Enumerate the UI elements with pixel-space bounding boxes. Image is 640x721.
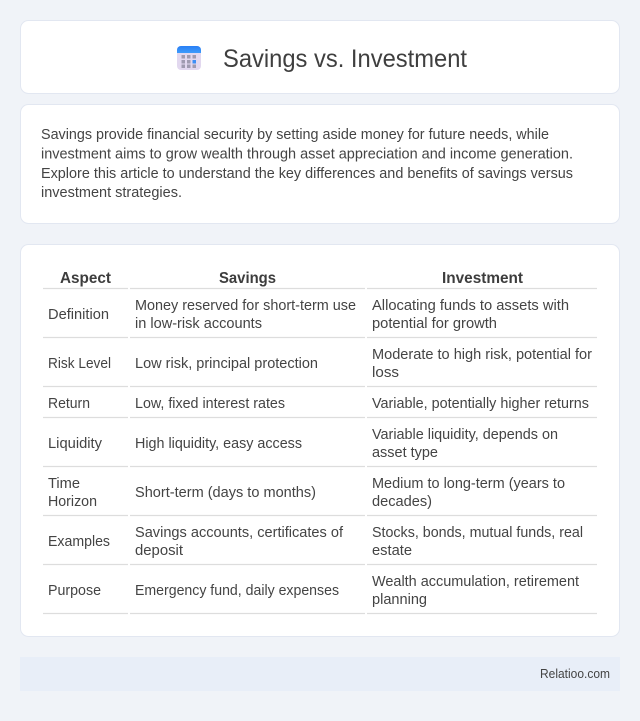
row: liquidity <box>48 427 558 461</box>
panel: header <box>20 20 620 94</box>
row: definition: Definition <box>48 307 109 323</box>
row: examples: estate <box>372 543 412 559</box>
row: definition: Money reserved for short-term use <box>135 298 356 314</box>
table header row <box>60 270 523 287</box>
row: risk level: Risk Level <box>48 356 111 372</box>
table header row: Savings <box>219 270 276 287</box>
row: liquidity: asset type <box>372 445 438 461</box>
row: examples: deposit <box>135 543 183 559</box>
row: time horizon: Short-term (days to months) <box>135 485 316 501</box>
description text: Explore this article to understand the key differences and benefits of savings versus <box>41 166 573 182</box>
row: return: Low, fixed interest rates <box>135 396 285 412</box>
row: purpose <box>48 574 579 608</box>
description text: Savings provide financial security by setting aside money for future needs, while <box>41 127 549 143</box>
row: return: Variable, potentially higher returns <box>372 396 589 412</box>
row: examples: Stocks, bonds, mutual funds, real <box>372 525 583 541</box>
row: definition <box>48 298 569 332</box>
row: liquidity: Variable liquidity, depends on <box>372 427 558 443</box>
row: purpose: Purpose <box>48 583 101 599</box>
row: definition: potential for growth <box>372 316 497 332</box>
row: time horizon: Horizon <box>48 494 97 510</box>
footer credit: Relatioo.com <box>540 667 610 681</box>
row: examples <box>48 525 583 559</box>
row: purpose: Emergency fund, daily expenses <box>135 583 339 599</box>
row: time horizon: Time <box>48 476 80 492</box>
row: definition: Allocating funds to assets with <box>372 298 569 314</box>
row: liquidity: Liquidity <box>48 436 103 452</box>
panel: comparison table <box>20 244 620 636</box>
table header row: Investment <box>442 270 523 287</box>
row: risk level: loss <box>372 365 399 381</box>
row: time horizon: Medium to long-term (years to <box>372 476 565 492</box>
row: examples: Examples <box>48 534 110 550</box>
panel: description <box>20 104 620 224</box>
row: purpose: Wealth accumulation, retirement <box>372 574 579 590</box>
row: time horizon <box>48 476 565 510</box>
row: liquidity: High liquidity, easy access <box>135 436 302 452</box>
row: return: Return <box>48 396 90 412</box>
table header row: Aspect <box>60 270 111 287</box>
description text: investment aims to grow wealth through asset appreciation and income generation. <box>41 146 573 162</box>
title: Savings vs. Investment <box>223 45 467 73</box>
row: risk level: Low risk, principal protection <box>135 356 318 372</box>
row: time horizon: decades) <box>372 494 432 510</box>
row: examples: Savings accounts, certificates of <box>135 525 344 541</box>
footer <box>20 657 620 691</box>
description text <box>41 127 573 201</box>
row: return <box>48 396 589 412</box>
icon: calendar <box>177 46 201 70</box>
row: risk level: Moderate to high risk, potential for <box>372 347 592 363</box>
row: definition: in low-risk accounts <box>135 316 262 332</box>
row: risk level <box>48 347 592 381</box>
description text: investment strategies. <box>41 185 182 201</box>
row: purpose: planning <box>372 592 427 608</box>
